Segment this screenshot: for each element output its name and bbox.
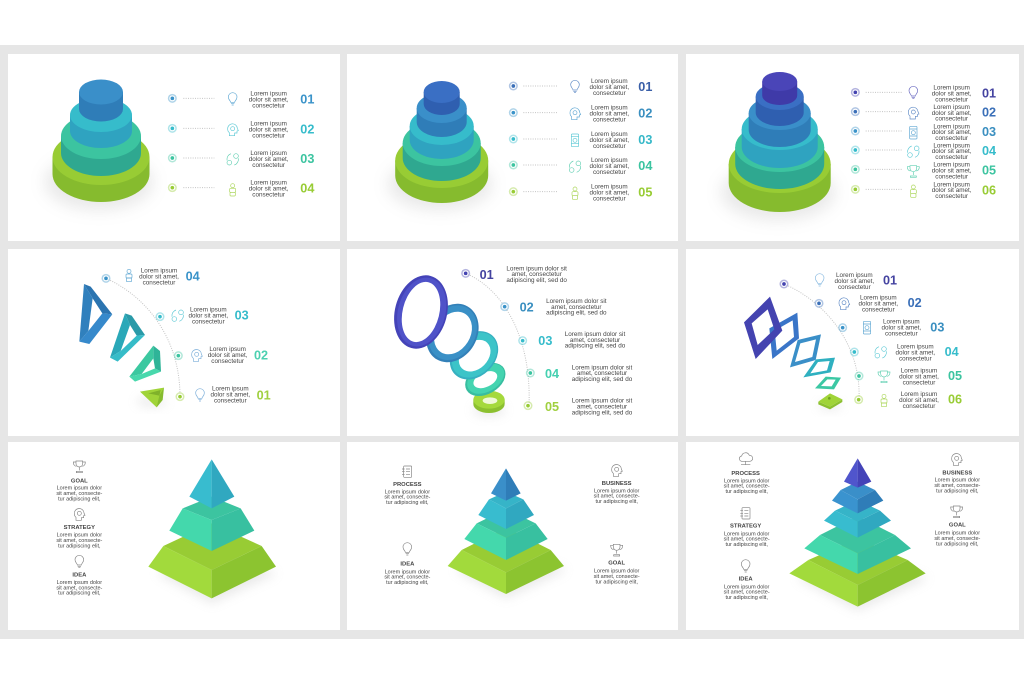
item 02: Lorem ipsum [250,120,287,127]
item 02: adipiscing elit, sed do [546,310,607,317]
item 05: consectetur [935,173,968,180]
label: business: BUSINESS [602,481,632,487]
item 03: Lorem ipsum [883,319,920,326]
label: strategy: STRATEGY [730,523,761,529]
item 02: consectetur [862,306,895,313]
item 03: dolor sit amet, [881,325,921,332]
item 04: Lorem ipsum [933,142,970,149]
item 04: 04 [545,367,559,381]
pyramid 5 levels [789,458,928,611]
item 02: 02 [908,296,922,310]
item 03 [851,123,996,142]
panel: triangles [8,249,340,436]
item 02: 02 [638,107,652,121]
item 06: consectetur [903,403,935,410]
item 03: Lorem ipsum [591,131,628,138]
diamond 2 [769,313,799,359]
item 01 [509,78,652,97]
label: goal: GOAL [949,523,966,529]
item 06: 06 [982,183,996,197]
label: idea [384,543,431,586]
item 02 [168,120,314,139]
label: idea: Lorem ipsum dolor [385,569,430,575]
label: idea: Lorem ipsum dolor [57,580,102,586]
item 01: amet, consectetur [512,271,562,278]
item 01 [175,386,271,405]
item 06 [854,391,962,410]
item 04: consectetur [252,192,285,199]
label: goal [594,544,640,585]
item 01 [168,90,314,109]
label: strategy: STRATEGY [64,525,95,531]
item 05 [854,367,962,386]
ring 2 [416,294,489,372]
label: business: Lorem ipsum dolor [594,488,640,494]
content: pyramid and labels [384,464,640,598]
item 02: dolor sit amet, [858,300,898,307]
item 03: Lorem ipsum [933,123,970,130]
item 02: Lorem ipsum [860,294,897,301]
item 02: dolor sit amet, [932,110,972,117]
label: business: BUSINESS [942,470,972,476]
label: goal: Lorem ipsum dolor [57,486,102,492]
item 01: consectetur [252,102,285,109]
item 01: consectetur [214,398,247,405]
label: idea: IDEA [72,572,87,578]
panel: cake with 5 tiers [347,54,678,241]
item 01: 01 [982,86,996,100]
item 02: consectetur [252,132,285,139]
item 04: 04 [638,159,652,173]
label: goal: GOAL [71,479,88,485]
item 01: dolor sit amet, [589,84,629,91]
label: goal: tur adipiscing elit, [58,496,101,502]
label: goal [934,506,981,547]
item 03: amet, consectetur [570,337,620,344]
item 01: Lorem ipsum [836,272,873,279]
panel: rings [347,249,678,436]
item 01: 01 [883,274,897,288]
label: business [594,464,640,505]
item 02: Lorem ipsum [591,105,628,112]
item 03: 03 [235,309,249,323]
item 05: consectetur [903,379,935,386]
item 04: Lorem ipsum [250,180,287,187]
item 05: 05 [948,369,962,383]
item 05: amet, consectetur [577,403,627,410]
label: idea: sit amet, consecte- [384,575,431,581]
label: business: tur adipiscing elit, [936,488,979,494]
item 01 [851,85,996,103]
item 04: dolor sit amet, [139,274,179,281]
pyramid 4 levels [448,468,567,598]
label: goal: Lorem ipsum dolor [935,531,980,537]
item 06: Lorem ipsum [933,181,970,188]
item 01: 01 [480,268,494,282]
content: pyramid and labels [56,459,277,603]
item 01: dolor sit amet, [932,90,972,97]
chart: receding 3D rings [386,265,633,416]
label: process [384,466,431,506]
item 05: 05 [982,163,996,177]
ring 4 [459,356,511,403]
label: idea [724,560,770,601]
item 01: Lorem ipsum [212,386,249,393]
label: process: sit amet, consecte- [724,484,770,490]
item 01: Lorem ipsum dolor sit [506,265,567,272]
item 04: 04 [300,182,314,196]
item 04 [101,268,200,287]
item 05: dolor sit amet, [932,167,972,174]
item 01 [461,265,567,284]
item 05: adipiscing elit, sed do [572,409,633,416]
label: business: sit amet, consecte- [934,483,981,489]
item 01: Lorem ipsum [591,78,628,85]
item 02: Lorem ipsum dolor sit [546,298,607,305]
item 02: 02 [982,106,996,120]
label: process: tur adipiscing elit, [386,500,429,506]
item 02: dolor sit amet, [589,111,629,118]
label: idea: tur adipiscing elit, [58,591,101,597]
item 03: 03 [982,125,996,139]
item 02 [500,298,607,317]
item 01: Lorem ipsum [933,85,970,92]
label: idea [56,555,103,597]
item 03 [518,331,626,350]
item 05: Lorem ipsum [933,162,970,169]
item 03: consectetur [593,143,626,150]
label: process: Lorem ipsum dolor [724,478,770,484]
item 02: Lorem ipsum [209,346,246,353]
item 04 [509,157,652,176]
chart: receding 3D diamonds [744,272,962,410]
label: business: sit amet, consecte- [594,494,640,500]
label: business [934,453,981,494]
item 04: Lorem ipsum [141,268,177,275]
item 02: 02 [254,349,268,363]
triangle 4 [79,284,112,344]
item 04: consectetur [143,280,175,287]
item 06: 06 [948,393,962,407]
item 03: Lorem ipsum [250,150,287,157]
label: goal: tur adipiscing elit, [936,541,979,547]
item 04: Lorem ipsum [897,343,934,350]
label: business: tur adipiscing elit, [595,499,638,505]
item 01: 01 [257,389,271,403]
item 03: adipiscing elit, sed do [565,343,626,350]
diamond 3 [790,334,821,367]
item 04: consectetur [593,169,626,176]
item 04: dolor sit amet, [895,349,935,356]
item 03: consectetur [885,331,918,338]
label: process [724,453,770,495]
label: process: sit amet, consecte- [384,495,431,501]
label: strategy: tur adipiscing elit, [725,542,768,548]
item 02: dolor sit amet, [249,126,289,133]
item 01: dolor sit amet, [249,96,289,103]
item 03: 03 [300,152,314,166]
label: idea: IDEA [739,577,753,583]
item 02 [509,105,652,124]
item 03: dolor sit amet, [188,312,228,319]
item 02 [174,346,268,365]
item 06: consectetur [935,193,968,200]
item 03 [838,319,944,338]
item 05: dolor sit amet, [589,190,629,197]
item 01: consectetur [593,90,626,97]
item 04: amet, consectetur [577,370,627,377]
item 05: 05 [545,400,559,414]
ring 5 [473,391,505,416]
ring 1 [386,269,456,355]
item 03: consectetur [252,162,285,169]
item 03: dolor sit amet, [932,129,972,136]
item 03: Lorem ipsum [190,306,227,313]
label: process: tur adipiscing elit, [725,489,768,495]
list of 4 items [168,90,314,199]
label: strategy: tur adipiscing elit, [58,543,101,549]
item 03: 03 [538,334,552,348]
item 04: dolor sit amet, [249,186,289,193]
item 05: consectetur [593,196,626,203]
item 06: Lorem ipsum [901,391,937,398]
chart: stacked cylinders 5 tiers [388,81,492,210]
item 04: consectetur [935,154,968,161]
label: idea: IDEA [400,562,415,568]
label: process: PROCESS [731,471,760,477]
item 04: 04 [945,345,959,359]
item 03: Lorem ipsum dolor sit [565,331,625,338]
item 01: 01 [638,80,652,94]
item 04 [526,364,633,383]
item 04: dolor sit amet, [589,163,629,170]
diamond 4 [803,358,835,377]
item 01: Lorem ipsum [250,90,287,97]
item 04 [851,142,996,161]
item 02: amet, consectetur [551,304,601,311]
label: idea: tur adipiscing elit, [725,595,768,601]
item 06: dolor sit amet, [932,187,972,194]
item 01: dolor sit amet, [834,278,874,285]
item 05 [509,184,652,203]
item 06 [851,181,996,200]
item 03: dolor sit amet, [589,137,629,144]
label: goal: tur adipiscing elit, [595,579,638,585]
label: goal: GOAL [608,561,626,567]
item 01: dolor sit amet, [210,392,250,399]
item 02 [851,104,996,123]
label: strategy: Lorem ipsum dolor [57,533,102,539]
item 06: dolor sit amet, [899,397,939,404]
pyramid 3 levels [148,459,277,603]
list of 6 items [851,85,996,200]
item 03: consectetur [192,318,225,325]
label: idea: Lorem ipsum dolor [724,584,770,590]
panel: cake with 4 tiers [8,54,340,241]
item 05 [523,398,633,416]
item 03: 03 [930,321,944,335]
diamond 6 [818,393,842,410]
label: idea: tur adipiscing elit, [386,580,429,586]
item 02: consectetur [593,117,626,124]
item 03 [168,150,314,169]
label: business: Lorem ipsum dolor [935,478,980,484]
item 05: Lorem ipsum [901,367,937,374]
item 03 [155,306,249,325]
item 04: Lorem ipsum dolor sit [572,364,632,371]
item 01: consectetur [935,96,968,103]
label: strategy: sit amet, consecte- [56,538,103,544]
item 05: 05 [638,186,652,200]
diamond 5 [815,377,841,389]
panel: diamonds [686,249,1019,436]
item 03: 03 [638,133,652,147]
item 02 [814,294,922,313]
label: goal: sit amet, consecte- [934,536,981,542]
label: goal: sit amet, consecte- [56,491,103,497]
panel: cake with 6 tiers [686,54,1019,241]
chart: stacked cylinders 4 tiers [45,80,153,210]
panel: pyramid with 3 levels [8,442,340,630]
triangle 3 [110,313,145,362]
item 02: 02 [520,301,534,315]
label: idea: sit amet, consecte- [56,585,103,591]
label: goal: sit amet, consecte- [594,574,640,580]
item 04: consectetur [899,355,932,362]
label: strategy: sit amet, consecte- [724,537,770,543]
item 04: dolor sit amet, [932,148,972,155]
item 01: consectetur [838,284,871,291]
panel: pyramid with 4 levels [347,442,678,630]
list of 5 items [509,78,652,203]
item 04 [168,180,314,199]
item 02: consectetur [211,358,244,365]
item 04: adipiscing elit, sed do [572,376,633,383]
item 05: Lorem ipsum [591,184,628,191]
label: goal: Lorem ipsum dolor [594,569,640,575]
item 03 [509,131,652,150]
item 02: Lorem ipsum [933,104,970,111]
item 05: dolor sit amet, [899,373,939,380]
item 04: Lorem ipsum [591,157,628,164]
label: strategy [724,508,770,548]
item 04 [850,343,959,362]
item 04: 04 [982,144,996,158]
ring 3 [440,321,508,389]
content: pyramid and labels [724,453,981,611]
label: goal [56,461,103,502]
panel: pyramid with 5 levels [686,442,1019,630]
label: strategy: Lorem ipsum dolor [724,531,770,537]
item 02: 02 [300,122,314,136]
item 01: adipiscing elit, sed do [506,277,567,284]
item 05 [851,162,996,180]
item 03: dolor sit amet, [249,156,289,163]
item 02: consectetur [935,116,968,123]
label: process: PROCESS [393,482,422,488]
item 05: Lorem ipsum dolor sit [572,398,632,405]
label: process: Lorem ipsum dolor [385,489,430,495]
diamond 1 [744,297,782,359]
item 01: 01 [300,92,314,106]
chart: stacked cylinders 6 tiers [721,72,835,220]
triangle 1 [137,388,167,407]
item 03: consectetur [935,135,968,142]
item 01 [779,272,897,291]
item 02: dolor sit amet, [208,352,248,359]
triangle 2 [129,346,161,382]
chart: receding 3D triangles [79,268,271,407]
label: strategy [56,508,103,549]
label: idea: sit amet, consecte- [724,590,770,596]
item 04: 04 [186,269,200,283]
